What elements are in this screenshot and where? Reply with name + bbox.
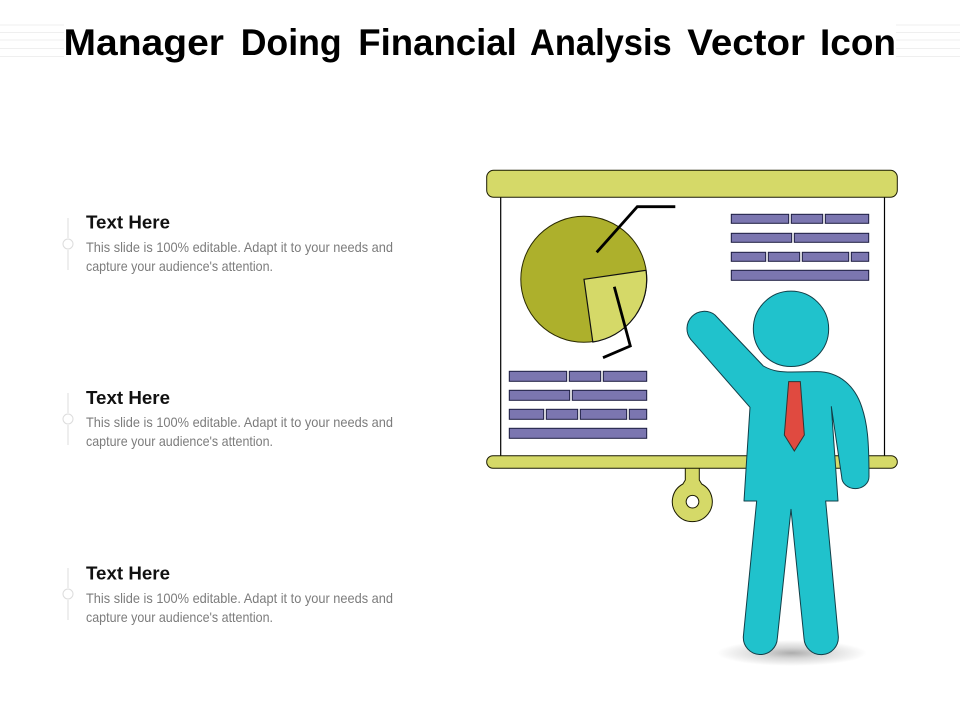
text block 3: capture your audience's attention.: [86, 609, 273, 625]
title: Financial: [358, 22, 517, 63]
title: Icon: [820, 22, 896, 63]
text block 3: [63, 564, 393, 625]
body: [687, 311, 869, 655]
text block 1: This slide is 100% editable. Adapt it to your needs and: [86, 239, 393, 255]
text block 2: [63, 388, 393, 449]
head: [753, 291, 829, 366]
icon: manager figure: [687, 291, 869, 655]
text block 3: This slide is 100% editable. Adapt it to your needs and: [86, 590, 393, 606]
text block 3: Text Here: [86, 564, 170, 584]
screen pull handle: [672, 468, 712, 522]
floor shadow: [717, 640, 867, 666]
screen sheet: [501, 190, 884, 460]
text bars: upper right: [731, 214, 869, 280]
text block 2: This slide is 100% editable. Adapt it to your needs and: [86, 414, 393, 430]
bottom roller: [487, 456, 897, 468]
callout line: small slice: [603, 287, 630, 358]
icon: projection screen: [487, 170, 897, 522]
text block 1: capture your audience's attention.: [86, 258, 273, 274]
callout line: large slice: [597, 207, 675, 252]
text block 1: [63, 212, 393, 274]
title: Vector: [687, 22, 805, 63]
title: Manager: [64, 22, 224, 63]
pie chart: [521, 207, 675, 358]
necktie: [784, 382, 804, 451]
title: Doing: [241, 22, 342, 63]
top roller: [487, 170, 897, 197]
text block 2: Text Here: [86, 388, 170, 408]
text bars: lower left: [509, 371, 647, 438]
title: Analysis: [530, 22, 672, 63]
text block 1: Text Here: [86, 212, 170, 232]
text block 2: capture your audience's attention.: [86, 433, 273, 449]
